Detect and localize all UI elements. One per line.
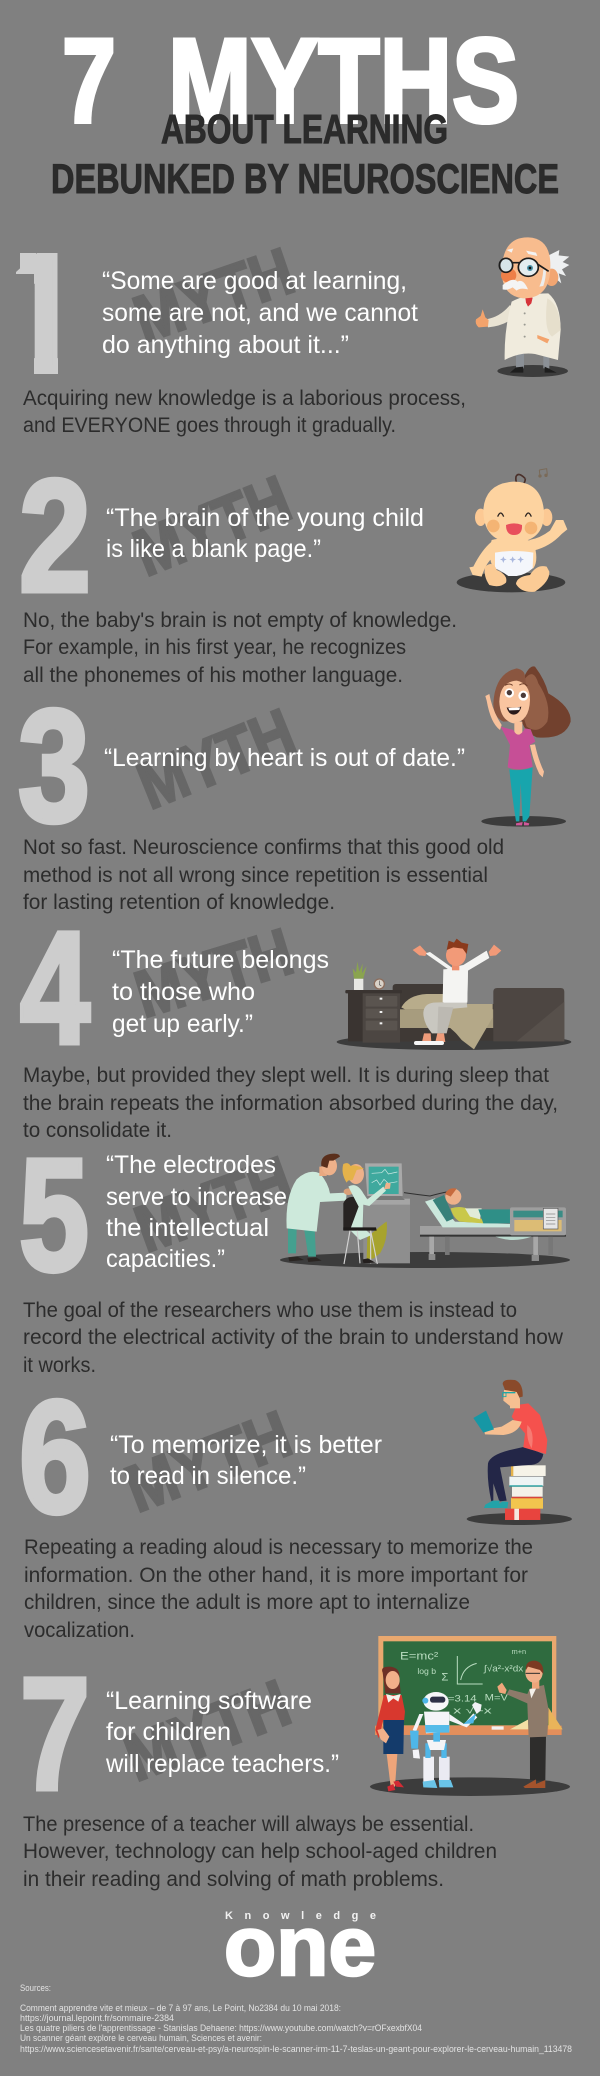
- explanation 4: the brain repeats the information absorbed during the day,: [23, 1091, 558, 1115]
- panel: myth 4: [20, 898, 571, 1142]
- number 1: 1: [7, 218, 79, 419]
- quote 5: capacities.”: [106, 1245, 225, 1273]
- explanation 5: record the electrical activity of the brain to understand how: [23, 1325, 563, 1349]
- quote 1: “Some are good at learning,: [102, 267, 407, 295]
- explanation 6: information. On the other hand, it is more important for: [24, 1563, 528, 1587]
- explanation 2: [23, 608, 457, 687]
- panel: myth 6: [19, 1367, 572, 1642]
- quote 7: for children: [106, 1718, 231, 1746]
- number 3: 3: [18, 676, 90, 855]
- watermark: myth: MYTH: [115, 1396, 301, 1526]
- explanation 6: children, since the adult is more apt to internalize: [24, 1590, 470, 1614]
- icon: researchers with patient: [280, 1154, 570, 1268]
- icon: teachers and robot at chalkboard: m+n: [512, 1647, 526, 1656]
- panel: myth 1: [16, 237, 570, 436]
- title: 7 MYTHS: MYTHS: [168, 14, 519, 148]
- sources: Comment apprendre vite et mieux – de 7 à 97 ans, Le Point, No2384 du 10 mai 2018:: [20, 2003, 341, 2013]
- number 5: 5: [19, 1125, 89, 1304]
- quote 3: “Learning by heart is out of date.”: [104, 744, 465, 772]
- explanation 1: and EVERYONE goes through it gradually.: [23, 413, 396, 437]
- explanation 2: all the phonemes of his mother language.: [23, 663, 403, 687]
- explanation 1: [23, 386, 466, 437]
- quote 2: [106, 504, 424, 563]
- icon: teachers and robot at chalkboard: x √ -x: [453, 1705, 493, 1715]
- number 4: 4: [20, 898, 90, 1077]
- icon: teachers and robot at chalkboard: E=mc²: [400, 1650, 439, 1662]
- explanation 4: Maybe, but provided they slept well. It is during sleep that: [23, 1063, 549, 1087]
- quote 4: get up early.”: [112, 1010, 253, 1038]
- icon: teachers and robot at chalkboard: ∫√a²-x²dx: [483, 1664, 524, 1674]
- watermark: myth: MYTH: [128, 694, 305, 823]
- quote 6: “To memorize, it is better: [110, 1431, 382, 1459]
- quote 5: serve to increase: [106, 1183, 287, 1211]
- icon: slippers: [414, 1026, 486, 1045]
- icon: baby: [457, 469, 567, 592]
- quote 1: [102, 267, 418, 359]
- explanation 3: [23, 835, 504, 914]
- icon: teachers and robot at chalkboard: Σ: [441, 1672, 448, 1684]
- icon: woman: [481, 666, 571, 827]
- quote 4: to those who: [112, 978, 255, 1006]
- quote 7: [105, 1687, 339, 1778]
- sources: Sources:: [20, 1983, 51, 1993]
- quote 4: “The future belongs: [112, 946, 329, 974]
- quote 2: “The brain of the young child: [106, 504, 424, 532]
- icon: teachers and robot at chalkboard: [370, 1636, 570, 1796]
- logo word: one: one: [224, 1899, 376, 1993]
- explanation 5: it works.: [23, 1353, 96, 1377]
- panel: myth 2: [19, 446, 567, 687]
- explanation 7: However, technology can help school-aged children: [23, 1839, 497, 1863]
- icon: teachers and robot at chalkboard: log b: [417, 1666, 436, 1676]
- explanation 2: No, the baby's brain is not empty of knowledge.: [23, 608, 457, 632]
- watermark: myth: MYTH: [126, 914, 301, 1031]
- quote 6: [110, 1431, 382, 1490]
- icon: teachers and robot at chalkboard: π=3.14: [440, 1693, 477, 1703]
- title: 7 MYTHS: [62, 14, 519, 148]
- explanation 2: For example, in his first year, he recognizes: [23, 635, 406, 659]
- number 6: 6: [19, 1367, 91, 1546]
- quote 7: “Learning software: [106, 1687, 312, 1715]
- quote 5: [106, 1151, 287, 1273]
- quote 7: will replace teachers.”: [105, 1750, 339, 1778]
- explanation 5: The goal of the researchers who use them is instead to: [23, 1298, 517, 1322]
- explanation 6: vocalization.: [24, 1618, 135, 1642]
- explanation 6: [24, 1535, 533, 1642]
- explanation 1: Acquiring new knowledge is a laborious process,: [23, 386, 466, 410]
- watermark: myth: MYTH: [125, 1142, 301, 1266]
- explanation 3: method is not all wrong since repetition is essential: [23, 863, 488, 887]
- explanation 7: [23, 1812, 497, 1891]
- logo word: Knowledge: Knowledge: [225, 1910, 376, 1922]
- icon: man waking up on bed: [337, 939, 571, 1050]
- explanation 3: for lasting retention of knowledge.: [23, 890, 335, 914]
- icon: teachers and robot at chalkboard: M=V: [485, 1693, 508, 1703]
- sources: [20, 1983, 572, 2054]
- explanation 4: to consolidate it.: [23, 1118, 172, 1142]
- icon: professor: [476, 237, 569, 377]
- number 1: [16, 253, 58, 374]
- quote 1: some are not, and we cannot: [102, 299, 418, 327]
- number 2: 2: [19, 446, 91, 625]
- quote 1: do anything about it...”: [102, 331, 349, 359]
- panel: myth 3: [18, 666, 571, 914]
- panel: myth 7: [20, 1636, 570, 1891]
- quote 4: [112, 946, 329, 1038]
- sources: https://www.sciencesetavenir.fr/sante/cerveau-et-psy/a-neurospin-le-scanner-irm-11-7-teslas-un-geant-pour-explorer-le-cerveau-humain_113478: [20, 2044, 572, 2054]
- quote 2: is like a blank page.”: [106, 535, 321, 563]
- title: 7 MYTHS: 7: [62, 14, 116, 148]
- explanation 6: Repeating a reading aloud is necessary to memorize the: [24, 1535, 533, 1559]
- explanation 3: Not so fast. Neuroscience confirms that this good old: [23, 835, 504, 859]
- watermark: myth: MYTH: [114, 1665, 300, 1795]
- watermark: myth: MYTH: [124, 461, 301, 590]
- number 7: 7: [20, 1644, 90, 1823]
- watermark: myth: MYTH: [124, 233, 303, 356]
- quote 5: the intellectual: [106, 1214, 269, 1242]
- sources: Les quatre piliers de l'apprentissage - Stanislas Dehaene: https://www.youtube.com/watch?v=rOFxexbfX04: [20, 2023, 422, 2033]
- title block: [51, 14, 559, 202]
- explanation 5: [23, 1298, 563, 1377]
- explanation 7: in their reading and solving of math problems.: [23, 1867, 444, 1891]
- quote 6: to read in silence.”: [110, 1462, 306, 1490]
- sources: Un scanner géant explore le cerveau humain, Sciences et avenir:: [20, 2033, 262, 2043]
- explanation 4: [23, 1063, 558, 1142]
- sources: https://journal.lepoint.fr/sommaire-2384: [20, 2013, 174, 2023]
- icon: man reading on books: [467, 1380, 572, 1525]
- quote 5: “The electrodes: [106, 1151, 276, 1179]
- explanation 7: The presence of a teacher will always be essential.: [23, 1812, 474, 1836]
- logo: Knowledge One: [224, 1899, 376, 1993]
- panel: myth 5: [19, 1125, 570, 1377]
- subtitle: about learning: ABOUT LEARNING: [161, 106, 448, 152]
